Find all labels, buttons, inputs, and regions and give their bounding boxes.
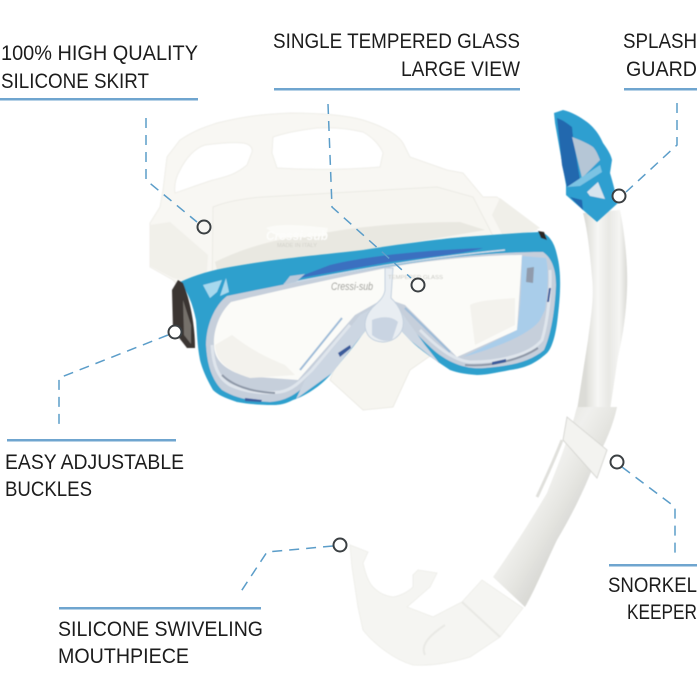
callout leader: splash guard [612,103,677,202]
lower tube collar and mouthpiece [350,545,523,665]
label: silicone skirt: SILICONE SKIRT [1,70,149,93]
label: silicone skirt [0,42,198,100]
label: buckles [5,439,184,501]
mask lens and frame: MADE IN ITALY [277,243,318,249]
buckle [172,280,195,348]
splash guard [554,110,618,222]
label: splash guard [623,30,697,90]
brand text on frame: Cressi-sub [331,281,373,293]
callout leader: buckles [59,326,182,427]
clear rim over the nose [296,303,440,399]
snorkel tube [350,210,627,665]
label: buckles: EASY ADJUSTABLE [5,451,184,474]
label: splash guard: GUARD [626,58,697,81]
top band highlight details [283,248,483,283]
skirt [212,187,500,410]
label: mouthpiece: MOUTHPIECE [58,645,189,668]
mask lens and frame: TEMPERED GLASS [388,275,444,281]
label: tempered glass [273,30,520,90]
callout leader: mouthpiece [240,538,346,593]
mask lens and frame: Cressi-sub [266,228,328,243]
label: tempered glass: LARGE VIEW [401,58,520,81]
mask skirt and strap [150,113,540,410]
label: mouthpiece [58,607,263,668]
label: silicone skirt: 100% HIGH QUALITY [1,42,198,65]
clear gasket [206,252,556,402]
callout leader: silicone skirt [146,118,210,234]
nose bridge [365,268,403,342]
snorkel keeper clip [563,417,607,478]
mask lens and frame [172,228,560,405]
blue frame outline [180,232,560,405]
callout leader: snorkel keeper [610,456,675,556]
label: buckles: BUCKLES [5,478,92,501]
callout leader: tempered glass [328,104,424,292]
label: tempered glass: SINGLE TEMPERED GLASS [273,30,520,53]
lens [214,255,522,380]
label: mouthpiece: SILICONE SWIVELING [58,618,263,641]
strap [150,113,537,300]
label: snorkel keeper [608,564,697,624]
